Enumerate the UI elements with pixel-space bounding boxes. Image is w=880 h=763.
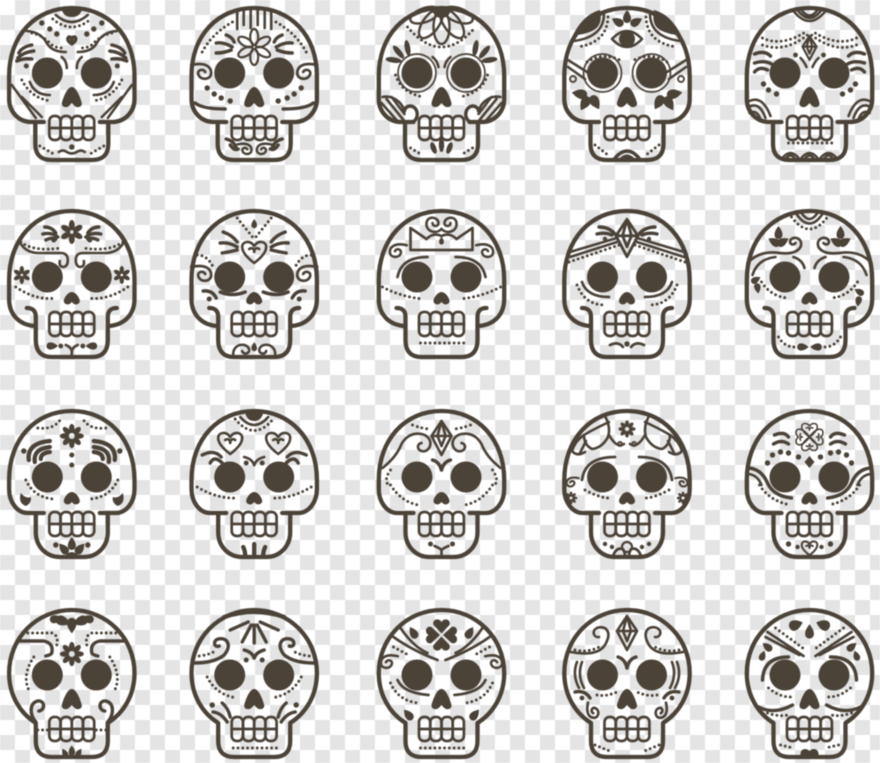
skull: row 1 column 1 (9, 8, 134, 160)
ornaments: heart, dotted V, spirals (191, 218, 317, 354)
ornaments: angry bands, drops, arcs (758, 617, 861, 756)
skull: row 3 column 3 (379, 411, 504, 557)
ornaments: diamond, scrolls, eye lines (571, 616, 683, 752)
skull: row 4 column 5 (747, 610, 872, 757)
ornaments: third eye, dark shoulders, drops (568, 10, 686, 160)
ornaments: diamond, scroll vines (382, 421, 500, 556)
skull: row 2 column 1 (9, 211, 134, 357)
ornaments: outlined petals, small flower (565, 416, 689, 556)
ornaments: diamond tiara, dotted arcs (569, 219, 685, 347)
ornaments: rays, scrolls, dotted arcs (194, 612, 314, 748)
skull: row 4 column 4 (564, 610, 690, 757)
skull: row 1 column 2 (191, 8, 317, 160)
skull: row 3 column 4 (564, 411, 690, 557)
skull: row 4 column 3 (379, 610, 504, 757)
ornaments: top fan flower, ringed eyes, cheek fans (380, 3, 502, 155)
ornaments: clover knot, dot arcs, waves (748, 423, 870, 555)
ornaments: flowers, curled band (13, 220, 131, 356)
ornaments: top petals, flower, spirals (19, 614, 125, 758)
skull: row 4 column 2 (192, 610, 317, 757)
skull: row 3 column 2 (192, 411, 317, 557)
skull: row 2 column 5 (747, 211, 872, 357)
ornaments: vines, leaves, dotted arcs (748, 213, 872, 351)
skull: row 1 column 4 (564, 8, 690, 160)
skull: row 4 column 1 (9, 610, 134, 758)
skull: row 1 column 5 (747, 8, 872, 160)
ornaments: top arcs, dotted swags, diamond (748, 10, 870, 158)
skull: row 2 column 2 (191, 211, 317, 357)
skull: row 2 column 4 (564, 211, 690, 357)
skull: row 2 column 3 (379, 211, 504, 357)
ornaments: twin hearts, dome, jaw stripes (197, 412, 311, 556)
ornaments: crown, spirals, dotted lines (382, 218, 500, 343)
skull: row 1 column 3 (379, 3, 504, 160)
skull: row 3 column 1 (9, 411, 134, 557)
ornaments: comb, flower, spirals (191, 9, 317, 154)
ornaments: dome, wavy brow, whiskers (12, 8, 132, 154)
ornaments: clover, bands, leaves (381, 619, 502, 748)
ornaments: flower, branches, jaw fan (20, 419, 124, 556)
skull: row 3 column 5 (747, 411, 872, 557)
